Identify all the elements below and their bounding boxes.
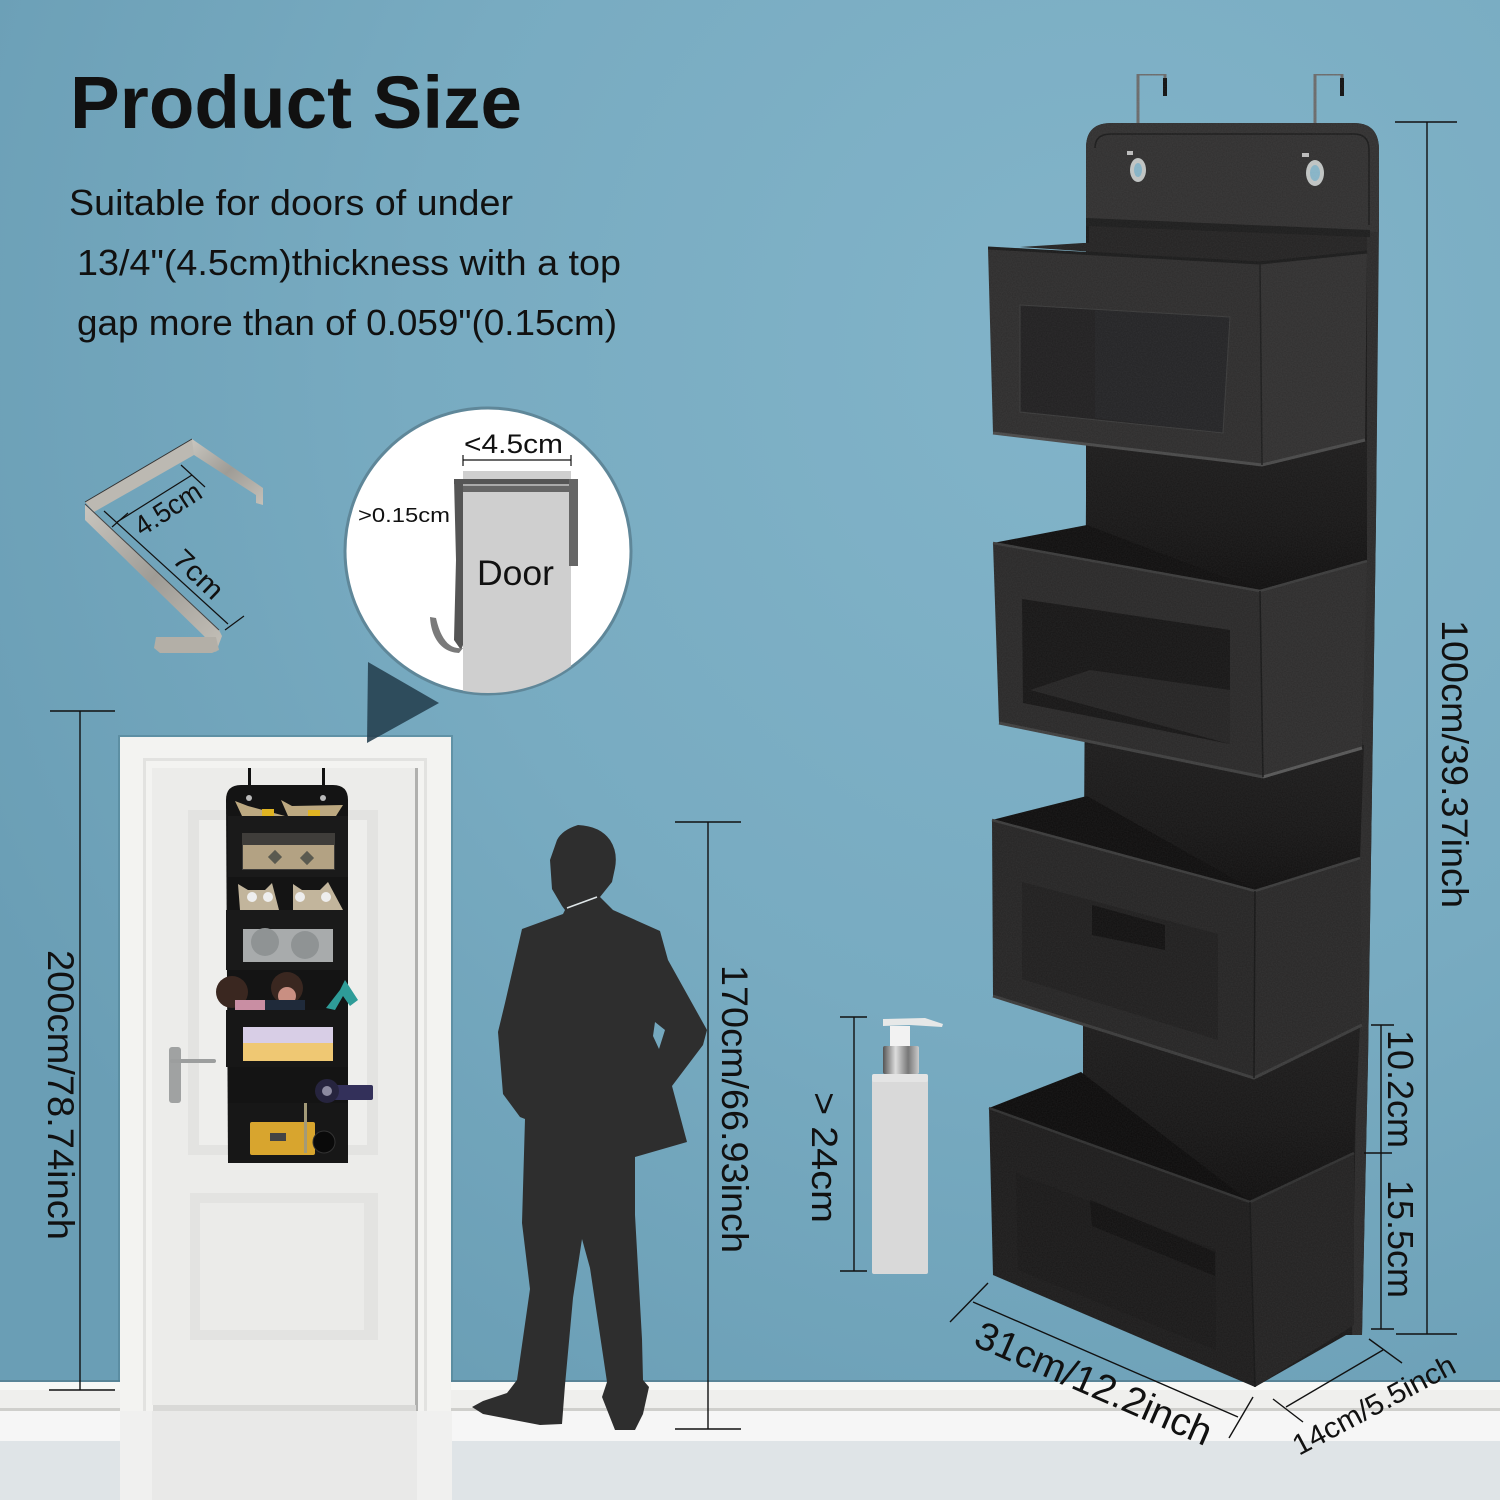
- dolls: [216, 972, 305, 1010]
- text block: door suitability: [69, 182, 621, 343]
- text block: door suitability: 13/4"(4.5cm)thickness with a top: [77, 242, 621, 283]
- organizer on door with items: [216, 768, 373, 1163]
- arrow: pointer to magnified view: [367, 662, 439, 743]
- teal accessory: [326, 980, 358, 1010]
- toy birds in pocket 1: [235, 800, 343, 816]
- pocket 2 window with plush: [243, 928, 333, 962]
- callout: magnified hook on door: [345, 408, 631, 701]
- callout: magnified hook on door: >0.15cm: [358, 505, 450, 527]
- dimension: person height 170cm: 170cm/66.93inch: [714, 965, 755, 1253]
- yellow bag: [250, 1103, 335, 1155]
- dimension: bottle height 24cm: > 24cm: [804, 1092, 845, 1223]
- door frame and door: [118, 735, 453, 1411]
- pocket 4: [989, 1025, 1360, 1387]
- dimension: pocket heights 10.2cm and 15.5cm: [1364, 1025, 1421, 1329]
- icon: pump bottle: [872, 1018, 943, 1274]
- icon: metal door hook with dimensions: 4.5cm: [128, 476, 207, 542]
- callout: magnified hook on door: <4.5cm: [464, 429, 563, 459]
- pocket 3: [992, 745, 1364, 1078]
- hair dryer: [315, 1079, 373, 1103]
- pocket 3 window with folded clothes: [243, 1027, 333, 1061]
- callout: magnified hook on door: Door: [477, 554, 554, 593]
- person silhouette: [472, 825, 707, 1430]
- dimension: door height 200cm: 200cm/78.74inch: [40, 950, 81, 1240]
- pocket 2: [993, 440, 1367, 777]
- dimension: total length 100cm: 100cm/39.37inch: [1434, 620, 1475, 908]
- icon: door handle: [169, 1047, 216, 1103]
- icon: metal door hook with dimensions: 7cm: [167, 543, 230, 606]
- organizer: main product: [988, 74, 1379, 1387]
- header panel: [1086, 123, 1379, 232]
- back panel: [1083, 123, 1379, 1387]
- icon: metal door hook with dimensions: [85, 439, 263, 653]
- dimension: depth 14cm: 14cm/5.5inch: [1287, 1349, 1461, 1462]
- toy owls: [238, 882, 343, 910]
- text block: door suitability: Suitable for doors of under: [69, 182, 513, 223]
- text block: door suitability: gap more than of 0.059"(0.15cm): [77, 302, 617, 343]
- metal hooks: [1138, 74, 1344, 123]
- title: Product Size: [70, 61, 522, 144]
- dimension: pocket heights 10.2cm and 15.5cm: 15.5cm: [1380, 1180, 1421, 1298]
- dimension: width 31cm: 31cm/12.2inch: [968, 1314, 1218, 1455]
- floor and baseboard: [0, 1380, 1500, 1500]
- grommets: [1127, 151, 1324, 186]
- pocket 1: [988, 240, 1367, 465]
- header seam and upper recess: [1086, 218, 1370, 258]
- dimension: width 31cm: [950, 1283, 1253, 1455]
- dimension: pocket heights 10.2cm and 15.5cm: 10.2cm: [1380, 1030, 1421, 1148]
- pocket 1 window with bag: [242, 833, 335, 870]
- side strip: [1352, 225, 1379, 1335]
